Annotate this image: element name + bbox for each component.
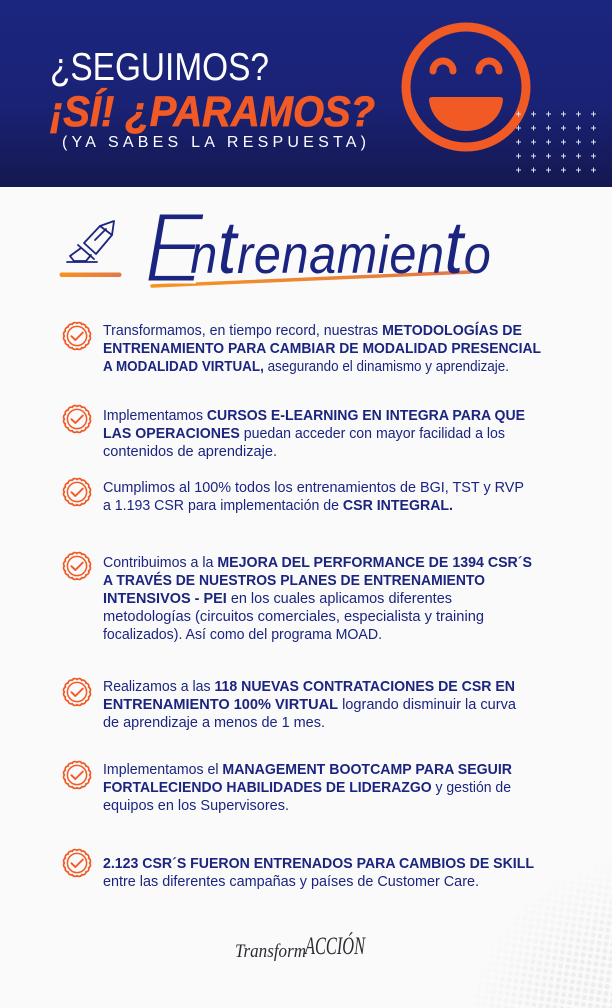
- text block 5: de aprendizaje a menos de 1 mes.: [103, 714, 325, 731]
- icon: check badge: [64, 479, 90, 505]
- title underline: [152, 272, 470, 286]
- icon: check badge: [64, 323, 90, 349]
- signature: TransformACCIÓN: Transform: [235, 941, 306, 962]
- halftone corner pattern: [524, 915, 612, 1008]
- heading: si paramos: ¡SÍ! ¿PARAMOS?: [50, 88, 375, 136]
- text block 4: A TRAVÉS DE NUESTROS PLANES DE ENTRENAMIENTO: [103, 572, 485, 589]
- icon: check badge: [64, 553, 90, 579]
- text block 2: contenidos de aprendizaje.: [103, 443, 277, 460]
- text block 7: entre las diferentes campañas y países de Customer Care.: [103, 873, 479, 890]
- text block 4: metodologías (circuitos comerciales, especialista y training: [103, 608, 484, 625]
- text block 3: [103, 479, 524, 514]
- text block 3: a 1.193 CSR para implementación de CSR INTEGRAL.: [103, 497, 453, 514]
- icon: pencil: [67, 221, 114, 262]
- text block 4: [103, 554, 532, 643]
- item 5: [64, 678, 517, 731]
- title script: Entrenamiento: E: [144, 193, 205, 304]
- text block 4: INTENSIVOS - PEI en los cuales aplicamos diferentes: [103, 590, 452, 607]
- icon: check badge: [64, 762, 90, 788]
- text block 4: Contribuimos a la MEJORA DEL PERFORMANCE DE 1394 CSR´S: [103, 554, 532, 571]
- text block 1: Transformamos, en tiempo record, nuestras METODOLOGÍAS DE: [103, 322, 522, 339]
- signature: TransformACCIÓN: [235, 932, 366, 962]
- signature: TransformACCIÓN: ACCIÓN: [304, 932, 366, 960]
- text block 1: [103, 322, 541, 375]
- text block 6: FORTALECIENDO HABILIDADES DE LIDERAZGO y gestión de: [103, 779, 511, 796]
- text block 3: Cumplimos al 100% todos los entrenamientos de BGI, TST y RVP: [103, 479, 524, 496]
- text block 6: [103, 761, 512, 814]
- text block 2: [103, 407, 525, 460]
- heading: seguimos: ¿SEGUIMOS?: [50, 46, 269, 89]
- text block 1: A MODALIDAD VIRTUAL, asegurando el dinamismo y aprendizaje.: [103, 358, 509, 375]
- header banner: [0, 0, 612, 187]
- icon: check badge: [64, 679, 90, 705]
- text block 1: ENTRENAMIENTO PARA CAMBIAR DE MODALIDAD PRESENCIAL: [103, 340, 541, 357]
- icon: check badge: [64, 406, 90, 432]
- text block 7: 2.123 CSR´S FUERON ENTRENADOS PARA CAMBIOS DE SKILL: [103, 855, 534, 872]
- text block 2: Implementamos CURSOS E-LEARNING EN INTEGRA PARA QUE: [103, 407, 525, 424]
- item 1: [64, 322, 541, 375]
- text block 7: [103, 855, 534, 890]
- item 7: [64, 850, 534, 890]
- text block 5: [103, 678, 517, 731]
- item 4: [64, 553, 532, 643]
- title script: Entrenamiento: trenamiento: [218, 206, 491, 289]
- title script: Entrenamiento: n: [190, 224, 218, 285]
- text block 6: Implementamos el MANAGEMENT BOOTCAMP PARA SEGUIR: [103, 761, 512, 778]
- item 2: [64, 406, 525, 460]
- text block 2: LAS OPERACIONES puedan acceder con mayor facilidad a los: [103, 425, 505, 442]
- icon underline: [60, 272, 122, 277]
- text block 4: focalizados). Así como del programa MOAD.: [103, 626, 382, 643]
- text block 5: ENTRENAMIENTO 100% VIRTUAL logrando disminuir la curva: [103, 696, 517, 713]
- item 3: [64, 479, 524, 514]
- icon: check badge: [64, 850, 90, 876]
- item 6: [64, 761, 512, 814]
- icon: smiley face: [406, 27, 526, 147]
- text block 6: equipos en los Supervisores.: [103, 797, 289, 814]
- text block 5: Realizamos a las 118 NUEVAS CONTRATACIONES DE CSR EN: [103, 678, 515, 695]
- subheading: (YA SABES LA RESPUESTA): [62, 134, 366, 151]
- plus grid decoration: [516, 112, 596, 172]
